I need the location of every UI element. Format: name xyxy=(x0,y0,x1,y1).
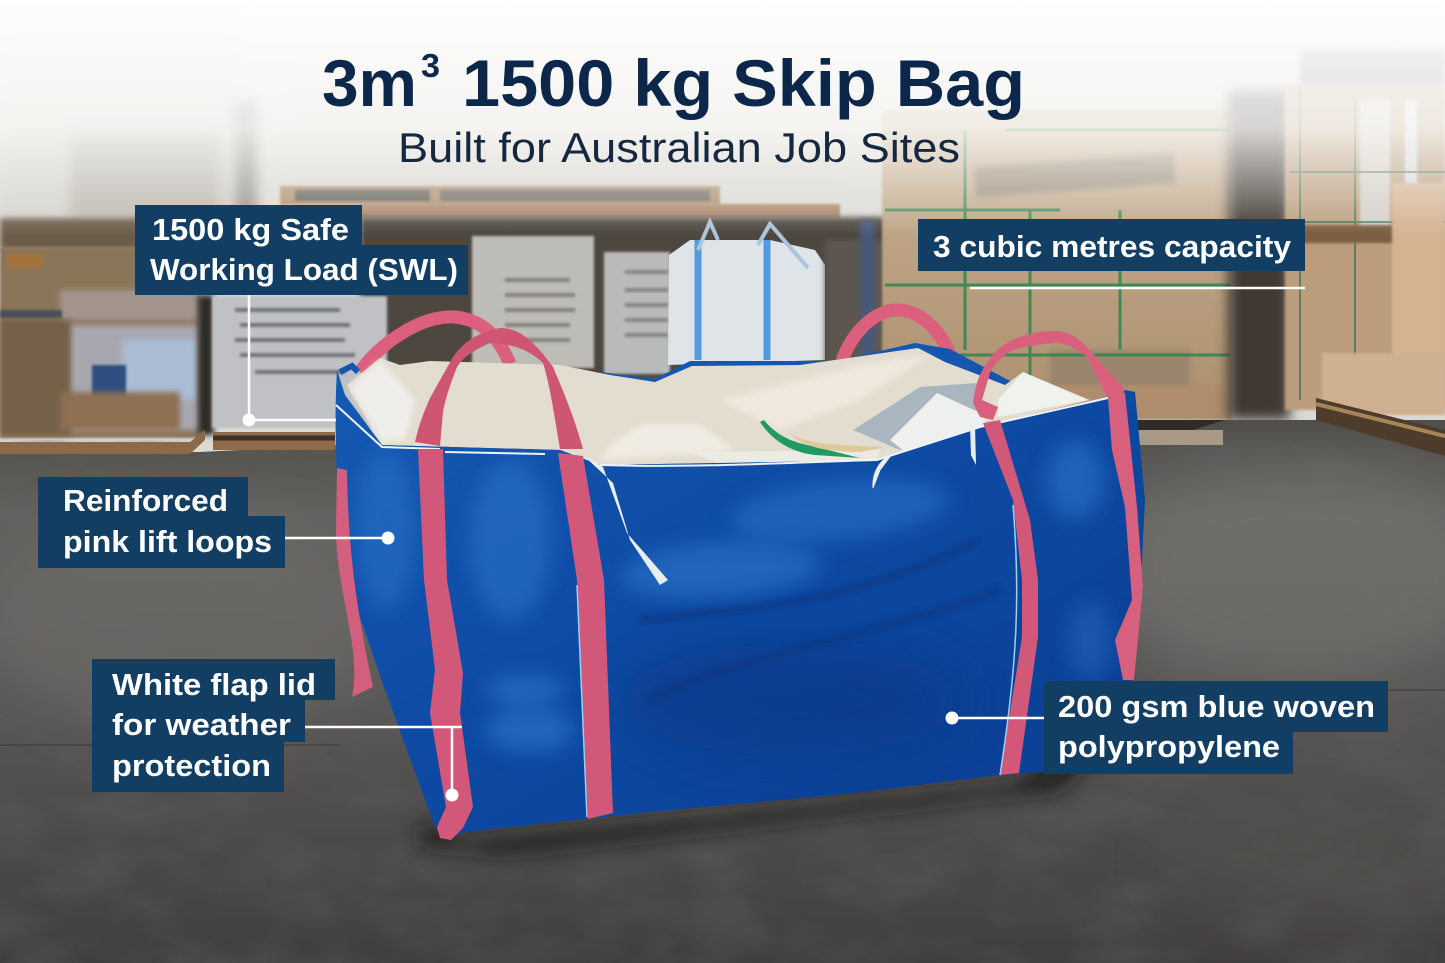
callout: safe working load: 1500 kg Safe xyxy=(152,212,349,247)
callout: lift loops xyxy=(38,477,394,568)
left pallets xyxy=(0,248,200,438)
callout: flap lid: protection xyxy=(112,748,271,783)
sacks xyxy=(212,296,387,428)
flap ties xyxy=(583,455,668,585)
callout: safe working load: Working Load (SWL) xyxy=(150,252,458,287)
back lift loops xyxy=(360,310,953,372)
top hem xyxy=(336,398,1108,466)
callout: woven polypropylene: 200 gsm blue woven xyxy=(1058,689,1375,724)
front straps xyxy=(418,420,1038,840)
bag shadow xyxy=(420,690,1150,855)
callout: lift loops: Reinforced xyxy=(63,483,228,518)
pallets on floor xyxy=(0,430,205,454)
callout: flap lid: for weather xyxy=(112,707,291,742)
callout: lift loops: pink lift loops xyxy=(63,524,272,559)
right cardboard stacks xyxy=(882,110,1232,420)
callout: capacity: 3 cubic metres capacity xyxy=(933,229,1292,264)
bag rim and contents xyxy=(600,343,1012,420)
subtitle: Built for Australian Job Sites xyxy=(398,124,960,171)
callout: flap lid xyxy=(92,659,462,802)
callout: woven polypropylene xyxy=(946,681,1388,774)
callout: flap lid: White flap lid xyxy=(112,667,316,702)
floor xyxy=(0,398,1445,963)
top white fade xyxy=(0,0,1445,235)
strap seam lines xyxy=(577,505,1017,817)
skip bag xyxy=(336,310,1145,840)
title: 3m xyxy=(322,46,417,120)
side strap left xyxy=(336,468,373,697)
callout: capacity xyxy=(918,219,1305,288)
callout: woven polypropylene: polypropylene xyxy=(1058,729,1280,764)
white bulk bag xyxy=(668,240,825,365)
warehouse background xyxy=(0,0,1445,460)
front lift loops xyxy=(415,328,1125,449)
callout: safe working load xyxy=(135,205,468,426)
bag body xyxy=(336,370,1145,839)
title: 3 xyxy=(421,47,440,84)
far right strap xyxy=(1108,393,1143,680)
bag sheen and wrinkles xyxy=(355,440,1112,755)
title: 1500 kg Skip Bag xyxy=(462,46,1025,120)
